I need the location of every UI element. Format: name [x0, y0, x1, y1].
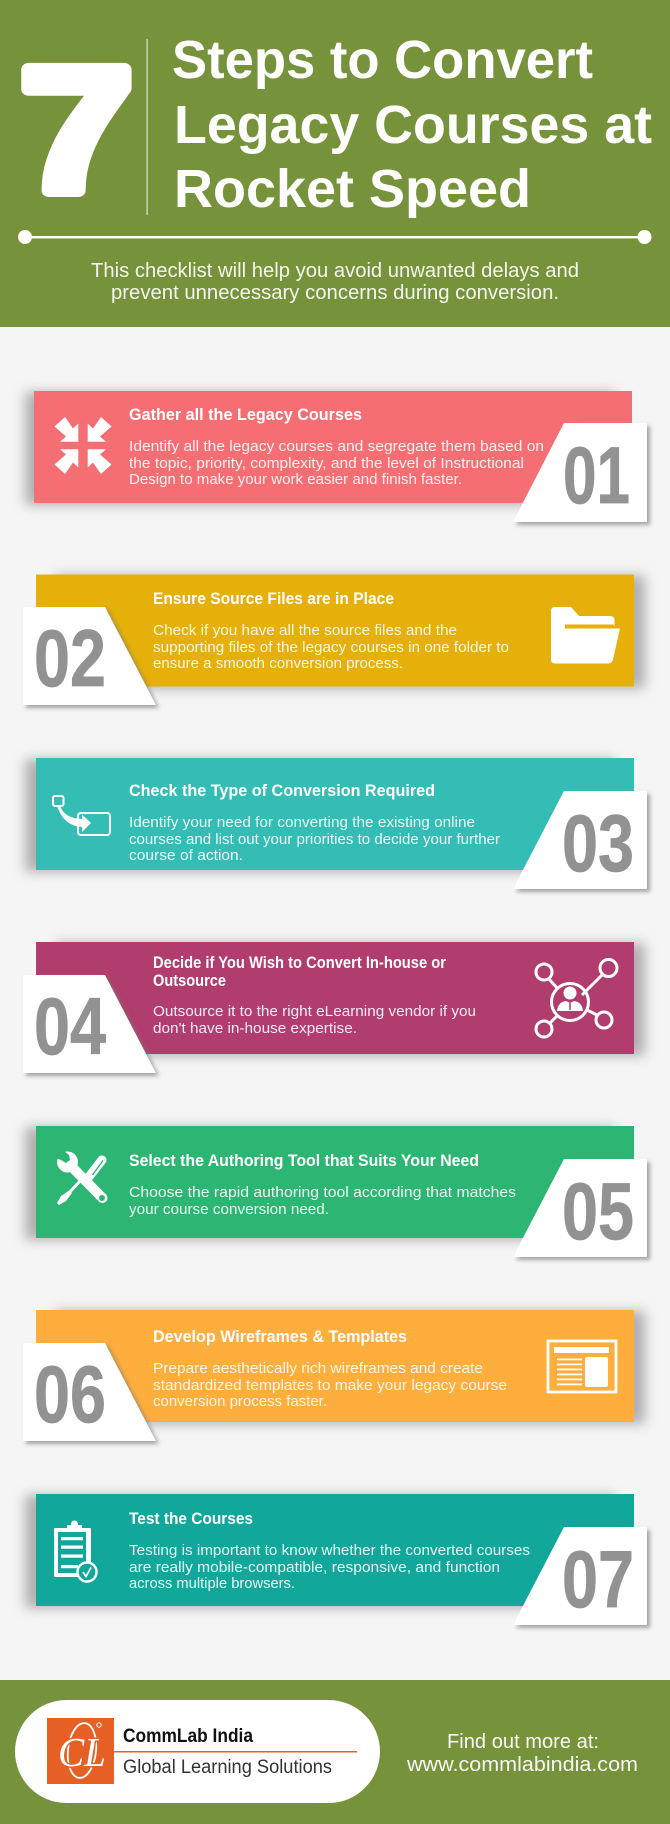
logo tagline: Global Learning Solutions: [123, 1757, 332, 1778]
header banner: [0, 0, 670, 327]
body text: Testing is important to know whether the converted courses: [129, 1542, 530, 1559]
vertical divider: [146, 39, 148, 215]
body text: the topic, priority, complexity, and the level of Instructional: [129, 455, 524, 472]
heading: Decide if You Wish to Convert In-house or: [153, 954, 447, 972]
heading: Ensure Source Files are in Place: [153, 590, 394, 608]
body text: across multiple browsers.: [129, 1575, 295, 1592]
panel: step 03: [25, 758, 650, 892]
body text: supporting files of the legacy courses in one folder to: [153, 639, 509, 656]
icon: folder: [551, 607, 620, 664]
heading: [153, 954, 447, 990]
body text: don't have in-house expertise.: [153, 1020, 357, 1037]
title: Rocket Speed: [174, 159, 531, 219]
panel: step 05: [25, 1126, 650, 1260]
heading: Select the Authoring Tool that Suits Your Need: [129, 1152, 479, 1170]
icon: convert arrow: [53, 796, 110, 835]
icon: wrench and screwdriver: [56, 1149, 106, 1205]
title: Steps to Convert: [172, 30, 593, 90]
body text: Design to make your work easier and finish faster.: [129, 471, 462, 488]
footer band: [0, 1680, 670, 1824]
body text: conversion process faster.: [153, 1393, 327, 1410]
horizontal rule with end dots: [18, 230, 652, 244]
icon: wireframe page: [548, 1341, 616, 1392]
number 04: 04: [34, 982, 106, 1072]
panel: step 02: [23, 574, 645, 708]
number 02: 02: [34, 614, 106, 704]
number 05: 05: [562, 1167, 634, 1257]
body text: Outsource it to the right eLearning vendor if you: [153, 1003, 476, 1020]
panel: step 04: [23, 942, 645, 1076]
icon: clipboard with check: [54, 1520, 96, 1582]
body text: standardized templates to make your legacy course: [153, 1377, 507, 1394]
find out more text: www.commlabindia.com: [406, 1754, 638, 1776]
body text: [129, 1184, 516, 1218]
body text: Prepare aesthetically rich wireframes and create: [153, 1360, 483, 1377]
heading: Test the Courses: [129, 1510, 253, 1528]
panel: step 06: [23, 1310, 645, 1444]
logo mark: CL: [47, 1718, 114, 1784]
body text: [129, 1542, 530, 1592]
heading: Outsource: [153, 972, 226, 990]
body text: Choose the rapid authoring tool according that matches: [129, 1184, 516, 1201]
find out more text: [406, 1731, 638, 1776]
body text: are really mobile-compatible, responsive, and function: [129, 1559, 500, 1576]
subtitle: This checklist will help you avoid unwanted delays and: [91, 260, 579, 282]
body text: courses and list out your priorities to decide your further: [129, 831, 500, 848]
number 06: 06: [34, 1350, 106, 1440]
big numeral 7: 7: [20, 32, 133, 228]
title: [172, 30, 652, 219]
logo name: CommLab India: [123, 1726, 253, 1747]
body text: [129, 814, 500, 864]
body text: ensure a smooth conversion process.: [153, 655, 403, 672]
find out more text: Find out more at:: [447, 1731, 599, 1753]
number 01: 01: [563, 431, 630, 521]
heading: Gather all the Legacy Courses: [129, 406, 362, 424]
panel: step 07: [25, 1494, 650, 1628]
logo rule: [114, 1751, 357, 1752]
body text: [153, 1003, 476, 1037]
logo pill: [15, 1700, 380, 1803]
heading: Develop Wireframes & Templates: [153, 1328, 407, 1346]
title: Legacy Courses at: [174, 95, 652, 155]
body text: your course conversion need.: [129, 1201, 329, 1218]
number 07: 07: [562, 1535, 634, 1625]
body text: course of action.: [129, 847, 243, 864]
body text: Identify your need for converting the existing online: [129, 814, 475, 831]
subtitle: prevent unnecessary concerns during conversion.: [111, 282, 559, 304]
heading: Check the Type of Conversion Required: [129, 782, 435, 800]
body text: [153, 622, 509, 672]
panel: step 01: [25, 391, 650, 525]
body text: [129, 438, 544, 488]
logo mark: CL: CL: [58, 1729, 106, 1775]
subtitle: [91, 260, 579, 304]
icon: inward arrows: [54, 417, 112, 474]
number 03: 03: [562, 799, 634, 889]
icon: network with person: [536, 960, 617, 1037]
body text: [153, 1360, 507, 1410]
body text: Check if you have all the source files and the: [153, 622, 457, 639]
body text: Identify all the legacy courses and segregate them based on: [129, 438, 544, 455]
